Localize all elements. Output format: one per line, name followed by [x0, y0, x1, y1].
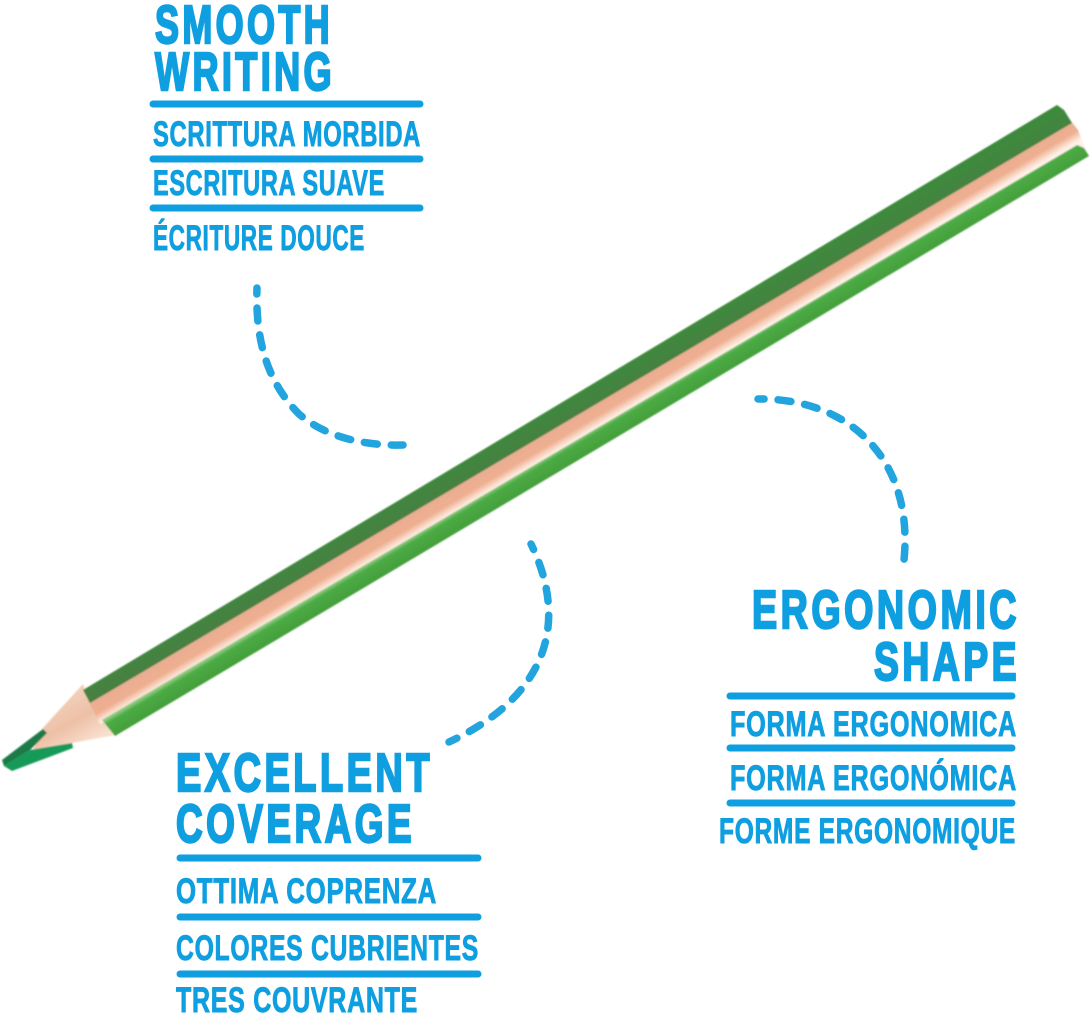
label: French: TRES COUVRANTE	[176, 981, 418, 1020]
dashed connector: excellent coverage	[449, 544, 549, 742]
dashed connector: ergonomic shape	[758, 399, 905, 560]
heading: ergonomic shape	[752, 580, 1020, 692]
heading: excellent coverage	[176, 743, 433, 854]
illustration: green pencil	[2, 105, 1089, 771]
dashed connector: smooth writing	[257, 288, 403, 445]
heading: smooth writing: WRITING	[155, 42, 335, 102]
label: French: ÉCRITURE DOUCE	[153, 218, 365, 258]
label: Italian: SCRITTURA MORBIDA	[153, 115, 421, 154]
heading: ergonomic shape: SHAPE	[874, 632, 1020, 692]
heading: excellent coverage: COVERAGE	[176, 794, 415, 854]
heading: smooth writing	[155, 0, 335, 102]
label: Spanish: COLORES CUBRIENTES	[176, 929, 479, 968]
pencil sharpened wood cone	[33, 684, 115, 750]
heading: excellent coverage: EXCELLENT	[176, 743, 433, 803]
pencil dark green stripe	[83, 105, 1072, 703]
pencil light green stripe	[102, 145, 1089, 736]
pencil wood body	[88, 120, 1085, 724]
text block: ergonomic shape	[719, 580, 1020, 851]
text block: smooth writing	[153, 0, 421, 258]
label: Spanish: ESCRITURA SUAVE	[153, 164, 385, 203]
pencil lead tip	[2, 729, 73, 771]
text block: excellent coverage	[176, 743, 479, 1020]
label: Italian: OTTIMA COPRENZA	[176, 872, 437, 911]
